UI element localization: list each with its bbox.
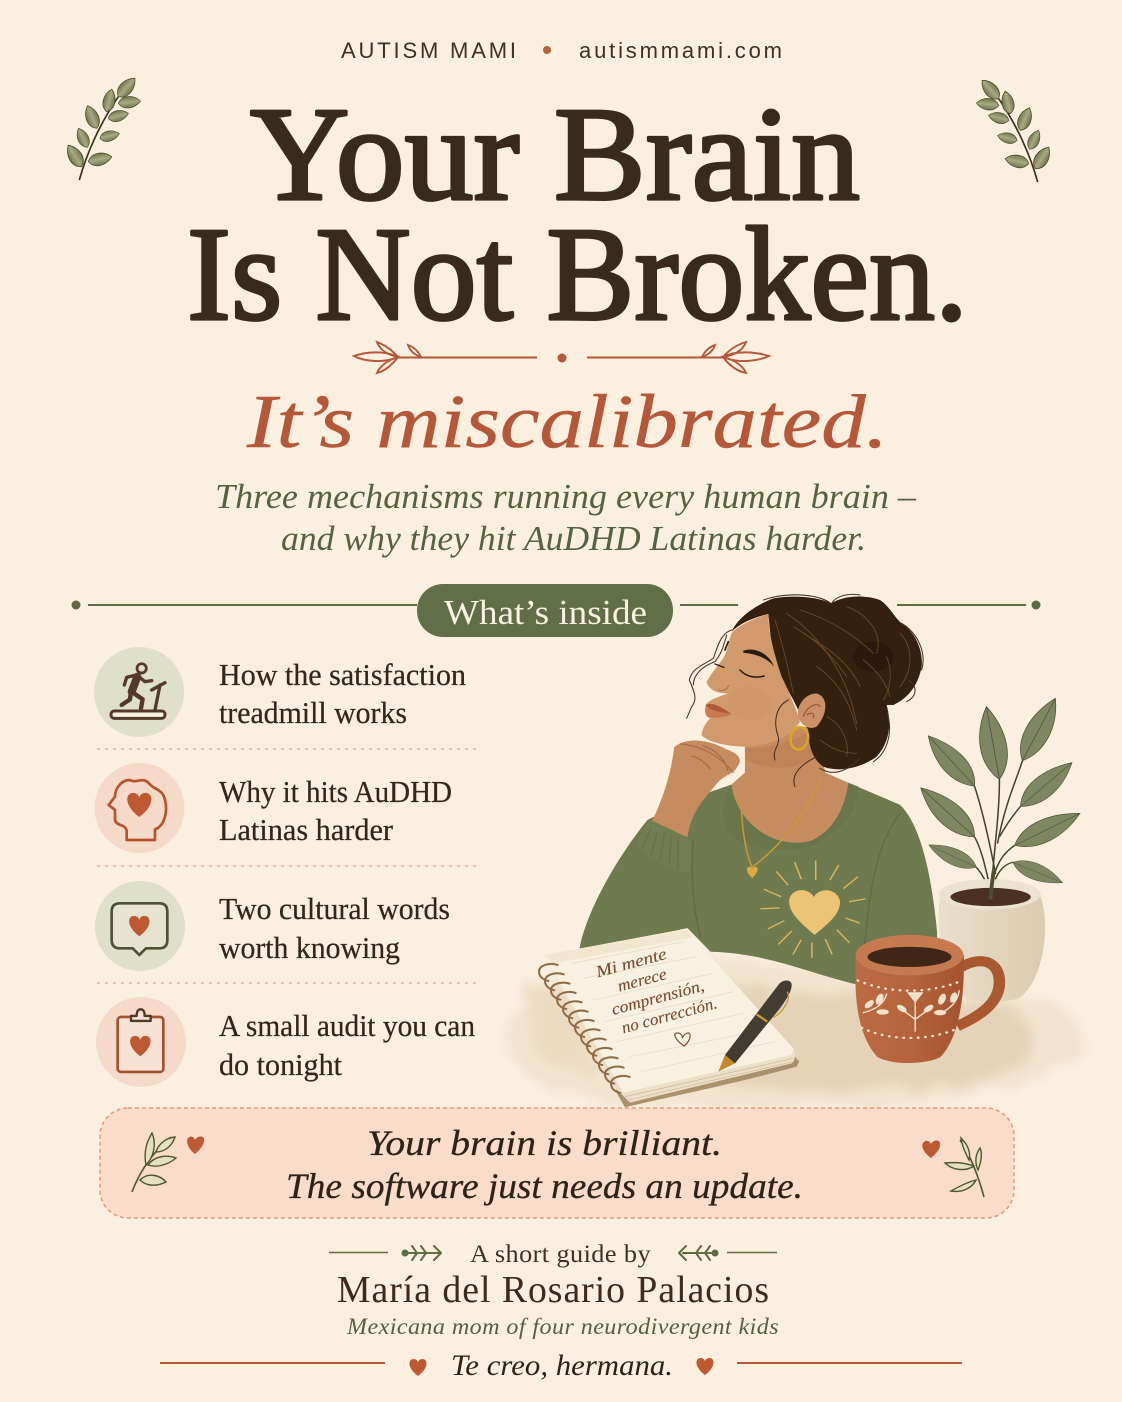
callout panel: The software just needs an update. bbox=[286, 1166, 803, 1206]
list item: satisfaction treadmill bbox=[94, 647, 466, 737]
title: Is Not Broken. bbox=[187, 200, 968, 348]
pen bbox=[718, 980, 792, 1072]
list item: satisfaction treadmill: treadmill works bbox=[219, 695, 407, 730]
notebook handwriting: merece bbox=[615, 964, 669, 996]
facial features bbox=[705, 642, 774, 718]
notebook and pen bbox=[539, 930, 799, 1107]
list item: small audit: do tonight bbox=[219, 1047, 342, 1082]
notebook handwriting: comprensión, bbox=[609, 976, 706, 1019]
coffee mug bbox=[855, 935, 999, 1063]
icon: left leaf sprig bbox=[63, 74, 141, 180]
subtitle: miscalibrated: It’s miscalibrated. bbox=[246, 380, 888, 464]
notebook heart doodle bbox=[675, 1033, 690, 1046]
woman's neck and chest bbox=[732, 725, 848, 843]
table wash bbox=[508, 955, 1081, 1108]
icon: treadmill runner bbox=[111, 664, 165, 718]
icon: speech bubble with heart bbox=[112, 903, 167, 955]
callout panel bbox=[100, 1108, 1014, 1218]
notebook handwriting bbox=[593, 944, 719, 1037]
list dividers bbox=[97, 749, 478, 983]
cheek blush bbox=[728, 687, 772, 720]
title: Your Brain bbox=[250, 80, 860, 228]
tagline bbox=[215, 477, 917, 558]
woman's head bbox=[687, 594, 923, 787]
illustration: woman with journal, plant and mug bbox=[508, 594, 1086, 1108]
woman's forearm and hand bbox=[649, 741, 740, 837]
woman's sweater bbox=[580, 783, 937, 989]
icon: clipboard with heart bbox=[118, 1009, 163, 1072]
callout panel: Your brain is brilliant. bbox=[367, 1123, 722, 1163]
notebook bbox=[539, 930, 799, 1107]
icon: head with heart bbox=[109, 780, 166, 840]
list item: small audit: A small audit you can bbox=[219, 1008, 475, 1043]
notebook handwriting: Mi mente bbox=[593, 944, 669, 981]
tagline: and why they hit AuDHD Latinas harder. bbox=[281, 519, 866, 558]
mug pattern bbox=[858, 981, 962, 1038]
section header: what's inside: What’s inside bbox=[444, 593, 647, 632]
list item: satisfaction treadmill: How the satisfaction bbox=[219, 657, 466, 692]
closing line bbox=[160, 1349, 962, 1382]
list item: why it hits harder: Why it hits AuDHD bbox=[219, 774, 452, 809]
sweater heart with rays bbox=[760, 861, 865, 958]
notebook handwriting: no corrección. bbox=[619, 993, 719, 1037]
hair strands bbox=[775, 607, 910, 757]
ear bbox=[798, 693, 825, 728]
header brand line: AUTISM MAMI bbox=[341, 38, 516, 63]
face bbox=[702, 614, 800, 747]
list item: why it hits harder bbox=[94, 763, 452, 853]
footer byline: María del Rosario Palacios bbox=[337, 1269, 770, 1311]
footer byline: A short guide by bbox=[470, 1241, 651, 1268]
hair mass and bun bbox=[732, 597, 922, 769]
tagline: Three mechanisms running every human brain – bbox=[215, 477, 917, 516]
necklace bbox=[741, 779, 821, 878]
plant bbox=[912, 694, 1086, 899]
list item: cultural words: worth knowing bbox=[219, 930, 400, 965]
plant pot bbox=[938, 871, 1045, 1002]
icon: right leaf sprig bbox=[976, 76, 1054, 182]
footer byline bbox=[329, 1241, 779, 1339]
list item: cultural words: Two cultural words bbox=[219, 891, 450, 926]
closing line: Te creo, hermana. bbox=[451, 1349, 673, 1382]
header brand line bbox=[341, 38, 782, 63]
finger lines bbox=[680, 744, 733, 773]
list item: small audit bbox=[96, 997, 475, 1087]
notebook spiral bbox=[539, 964, 630, 1093]
earring bbox=[789, 726, 810, 751]
footer byline: Mexicana mom of four neurodivergent kids bbox=[346, 1314, 779, 1339]
list item: why it hits harder: Latinas harder bbox=[219, 812, 394, 847]
bun shadow bbox=[853, 642, 893, 672]
curls and wisps bbox=[687, 594, 923, 787]
icon: callout left sprig and heart bbox=[132, 1133, 204, 1192]
title bbox=[187, 80, 968, 348]
section header: what's inside bbox=[72, 584, 1040, 637]
ornamental divider bbox=[354, 342, 769, 373]
header brand line: autismmami.com bbox=[579, 38, 782, 63]
icon: callout right sprig and heart bbox=[922, 1138, 984, 1197]
icon: byline sprigs bbox=[402, 1246, 718, 1260]
list item: cultural words bbox=[95, 881, 450, 971]
sleeve and cuff bbox=[580, 819, 692, 948]
